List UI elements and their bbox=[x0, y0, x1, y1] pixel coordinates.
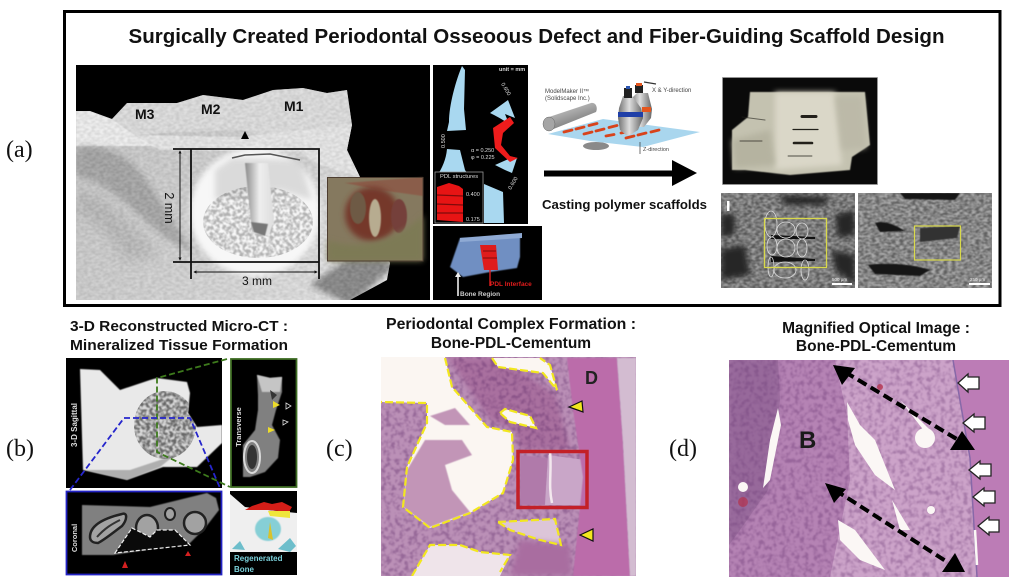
PDL structures inset: 0.400 bbox=[466, 192, 480, 198]
tooth labels: M2 bbox=[201, 101, 221, 117]
panel label (a): (a) bbox=[6, 137, 33, 163]
dimension text: 0.600 bbox=[499, 82, 511, 97]
dashed arrows bbox=[835, 372, 960, 565]
panel b heading bbox=[70, 318, 288, 354]
panel label (c): (c) bbox=[326, 436, 353, 462]
red region of interest box bbox=[518, 452, 587, 508]
panel b: 3-D sagittal bbox=[66, 358, 222, 488]
panel c: histology bbox=[381, 357, 636, 576]
dentin bbox=[567, 358, 630, 576]
panel label (d): (d) bbox=[669, 436, 697, 462]
panel b: transverse bbox=[231, 359, 296, 487]
dimension text: 0.600 bbox=[508, 176, 520, 191]
blue bone region shapes bbox=[447, 66, 466, 131]
SEM image 2 bbox=[858, 193, 992, 288]
dimension text bbox=[441, 67, 525, 191]
SEM image 2: 250 μm bbox=[970, 277, 985, 282]
3-D printing illustration: X & Y-direction bbox=[652, 88, 691, 94]
white arrows bbox=[958, 374, 999, 535]
dimension text: α = 0.250 bbox=[471, 148, 494, 154]
micro-CT image of surgical defect: 3 mm bbox=[242, 274, 272, 288]
panel label (b): (b) bbox=[6, 436, 34, 462]
tooth labels bbox=[136, 102, 304, 119]
micro-CT image of surgical defect bbox=[76, 65, 430, 305]
printer name: ModelMaker II™ bbox=[545, 88, 589, 95]
guide lines bbox=[70, 359, 230, 490]
PDL structures inset bbox=[435, 172, 483, 223]
yellow dashed outlines bbox=[381, 358, 561, 576]
3-D printing illustration: Z-direction bbox=[643, 147, 669, 153]
panel b: coronal bbox=[66, 492, 222, 574]
process arrow bbox=[544, 160, 697, 186]
bone label: B bbox=[799, 427, 816, 454]
PDL structures inset: 0.175 bbox=[466, 217, 480, 223]
dimension text: unit = mm bbox=[499, 67, 525, 73]
yellow arrowheads bbox=[569, 401, 583, 412]
cementum line bbox=[953, 360, 1009, 577]
transverse label: Transverse bbox=[234, 407, 243, 447]
casting label: Casting polymer scaffolds bbox=[542, 197, 707, 212]
3-D scaffold model bbox=[433, 226, 542, 300]
panel c heading bbox=[386, 316, 636, 352]
3-D scaffold model: Bone Region bbox=[460, 291, 500, 298]
title: Surgically Created Periodontal Osseoous Defect and Fiber-Guiding Scaffold Design bbox=[128, 25, 944, 48]
dentin label: D bbox=[585, 368, 598, 388]
dimension labels: 2 mm bbox=[162, 192, 176, 224]
dimension text: φ = 0.225 bbox=[471, 155, 495, 161]
panel c heading: Bone-PDL-Cementum bbox=[431, 335, 591, 352]
panel a frame bbox=[64, 12, 1000, 306]
regenerated bone label bbox=[234, 554, 283, 574]
cavity whitespace bbox=[381, 357, 513, 528]
panel b heading: 3-D Reconstructed Micro-CT : bbox=[70, 318, 288, 335]
sagittal label: 3-D Sagittal bbox=[70, 403, 79, 447]
panel b: regenerated bone model bbox=[230, 491, 297, 575]
tooth labels: M3 bbox=[135, 106, 155, 122]
regenerated bone label: Regenerated bbox=[234, 554, 283, 563]
panel d heading: Magnified Optical Image : bbox=[782, 320, 970, 337]
regenerated bone label: Bone bbox=[234, 565, 255, 574]
pdl tissue bbox=[830, 360, 977, 577]
panel d heading bbox=[782, 320, 970, 355]
3-D printing illustration bbox=[543, 82, 700, 154]
red PDL fibre shape bbox=[493, 117, 518, 162]
panel d heading: Bone-PDL-Cementum bbox=[796, 338, 956, 355]
coronal label: Coronal bbox=[70, 524, 79, 552]
panel c heading: Periodontal Complex Formation : bbox=[386, 316, 636, 333]
white gaps in tissue bbox=[738, 400, 935, 570]
SEM image 1: 500 μm bbox=[832, 277, 847, 282]
PDL structures inset: PDL structures bbox=[440, 174, 478, 180]
dimension text: 0.500 bbox=[441, 134, 447, 148]
surgical photo inset bbox=[328, 177, 423, 261]
scaffold design drawing bbox=[433, 65, 528, 224]
panel b heading: Mineralized Tissue Formation bbox=[70, 337, 288, 354]
SEM image 1 bbox=[721, 193, 855, 288]
scaffold photo bbox=[722, 78, 878, 184]
3-D printing illustration: (Solidscape Inc.) bbox=[545, 96, 590, 102]
measurement box bbox=[173, 149, 319, 279]
panel d: magnified histology bbox=[729, 360, 1009, 577]
tooth labels: M1 bbox=[284, 98, 304, 114]
3-D scaffold model: PDL Interface bbox=[490, 281, 532, 288]
